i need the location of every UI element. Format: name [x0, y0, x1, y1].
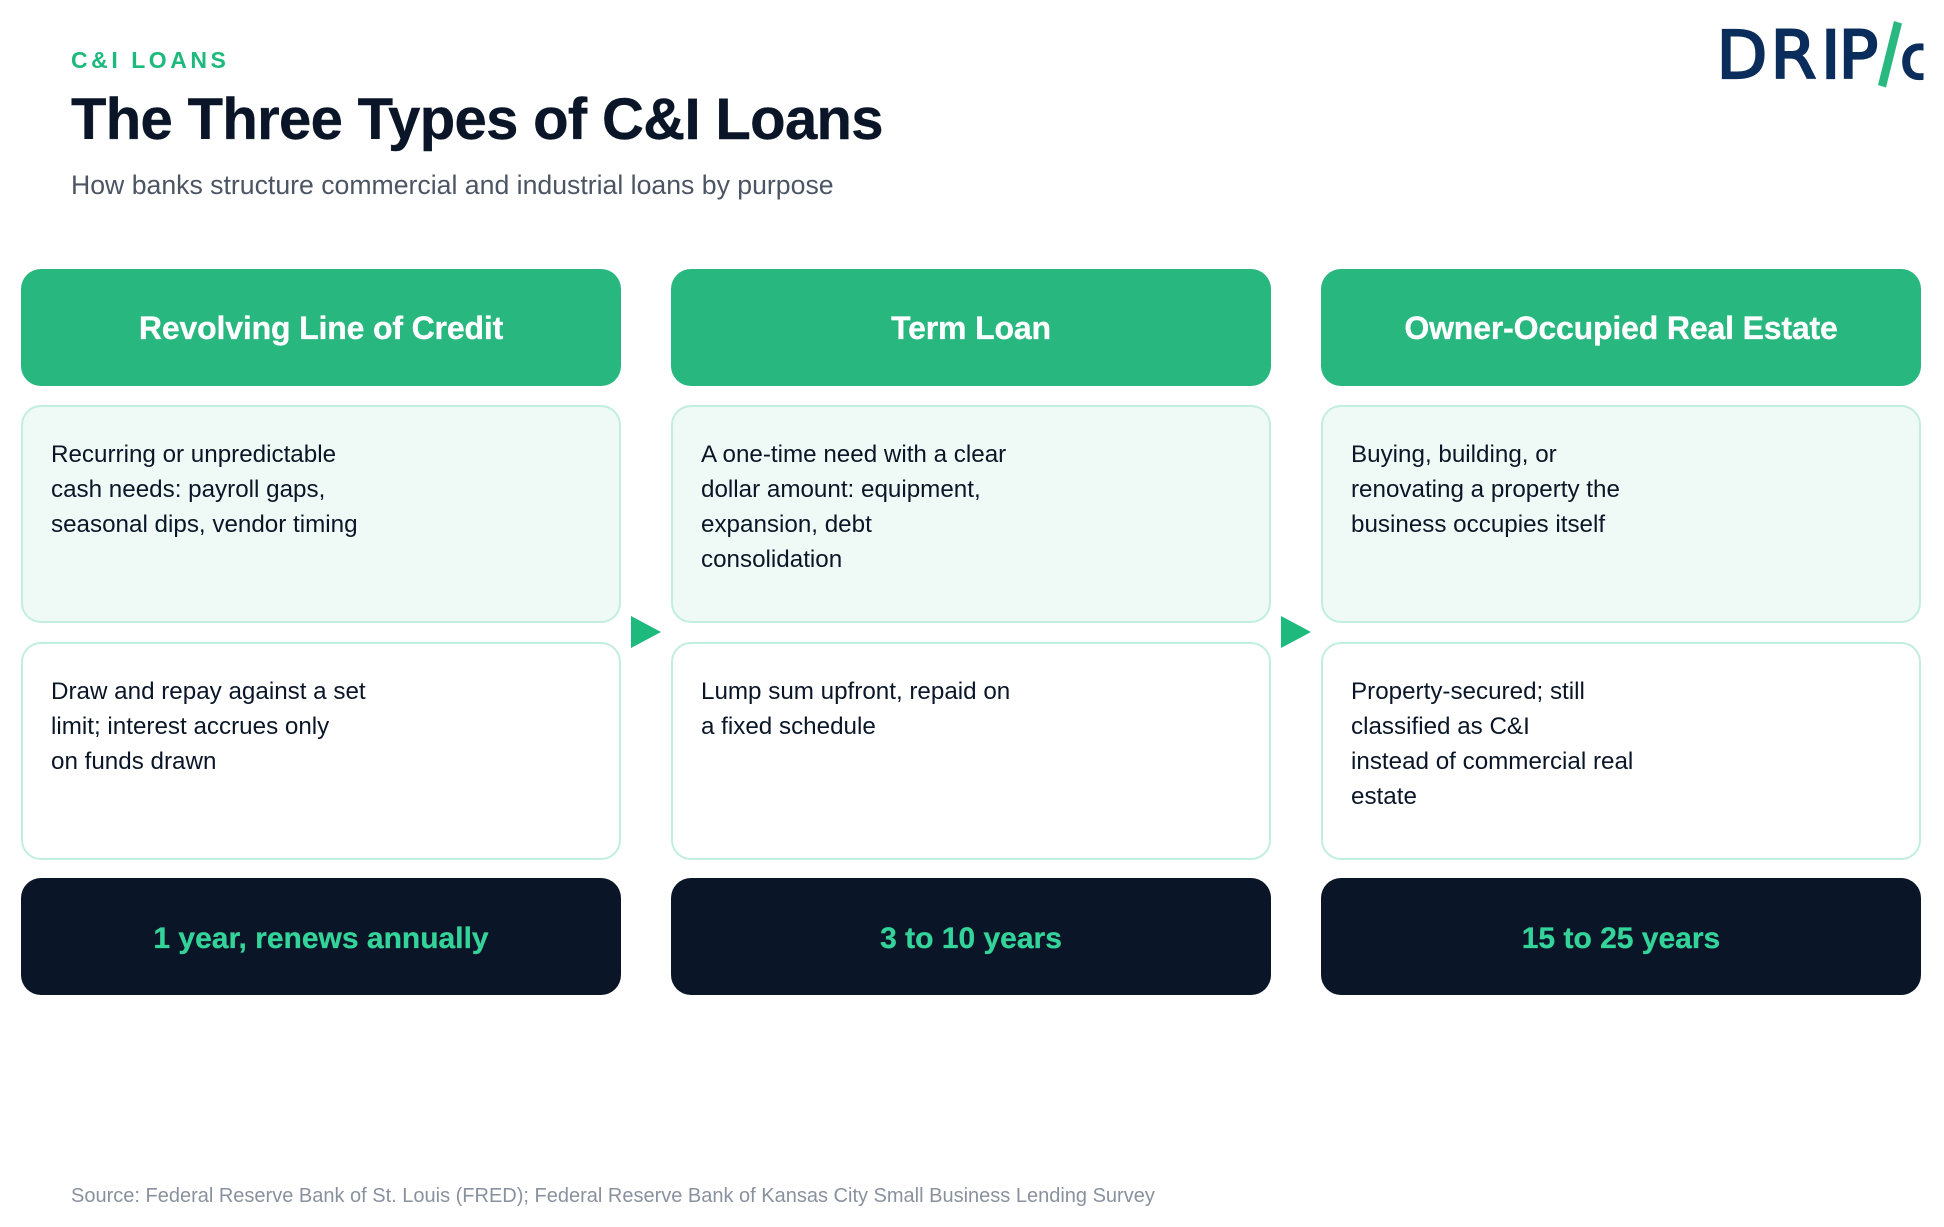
column 2 need panel: dollar amount: equipment,	[701, 476, 981, 503]
logo: DRIP/c: D	[1716, 17, 1767, 94]
column 2 term	[671, 878, 1271, 995]
column 2 header	[671, 268, 1271, 386]
column 1 term: 1 year, renews annually	[153, 922, 489, 955]
column 2 structure panel: a fixed schedule	[701, 713, 876, 740]
eyebrow label: C&I LOANS	[71, 47, 229, 73]
column 2 term: 3 to 10 years	[880, 922, 1062, 955]
column 1 structure panel: on funds drawn	[51, 748, 216, 775]
column 2 need panel: expansion, debt	[701, 511, 872, 538]
column 1 need panel	[21, 405, 621, 623]
source note: Source: Federal Reserve Bank of St. Louis (FRED); Federal Reserve Bank of Kansas City Small Business Lending Survey	[71, 1185, 1155, 1207]
column 3 term	[1321, 878, 1921, 995]
column 3 need panel: Buying, building, or	[1351, 441, 1557, 468]
column 2 structure panel: Lump sum upfront, repaid on	[701, 678, 1010, 705]
column 3 header: Owner-Occupied Real Estate	[1404, 310, 1838, 346]
arrow 2	[1281, 616, 1311, 648]
column 3 header	[1321, 268, 1921, 386]
column 2 need panel: A one-time need with a clear	[701, 441, 1006, 468]
column 2 need panel: consolidation	[701, 546, 842, 573]
column 1 need panel: Recurring or unpredictable	[51, 441, 336, 468]
column 3 need panel: renovating a property the	[1351, 476, 1620, 503]
column 3 structure panel	[1321, 642, 1921, 860]
column 2 header: Term Loan	[891, 310, 1051, 346]
logo: DRIP/c: R	[1770, 17, 1816, 94]
column 1 need panel: seasonal dips, vendor timing	[51, 511, 358, 538]
column 1 structure panel	[21, 642, 621, 860]
column 1 term	[21, 878, 621, 995]
logo: DRIP/c: c	[1900, 23, 1933, 93]
logo: DRIP/c: I	[1821, 17, 1840, 94]
column 3 structure panel: classified as C&I	[1351, 713, 1530, 740]
title: The Three Types of C&I Loans	[71, 86, 883, 152]
logo: DRIP/c: P	[1838, 17, 1878, 94]
column 1 structure panel: Draw and repay against a set	[51, 678, 366, 705]
column 2 need panel	[671, 405, 1271, 623]
logo: DRIP/c	[1722, 21, 1924, 88]
arrow 1	[631, 616, 661, 648]
column 3 term: 15 to 25 years	[1522, 922, 1720, 955]
column 1 header: Revolving Line of Credit	[139, 310, 503, 346]
column 2 structure panel	[671, 642, 1271, 860]
column 3 structure panel: estate	[1351, 783, 1417, 810]
column 3 structure panel: instead of commercial real	[1351, 748, 1633, 775]
column 3 structure panel: Property-secured; still	[1351, 678, 1585, 705]
column 1 header	[21, 268, 621, 386]
column 1 structure panel: limit; interest accrues only	[51, 713, 329, 740]
column 3 need panel: business occupies itself	[1351, 511, 1605, 538]
column 1 need panel: cash needs: payroll gaps,	[51, 476, 325, 503]
column 3 need panel	[1321, 405, 1921, 623]
subtitle: How banks structure commercial and industrial loans by purpose	[71, 170, 834, 200]
